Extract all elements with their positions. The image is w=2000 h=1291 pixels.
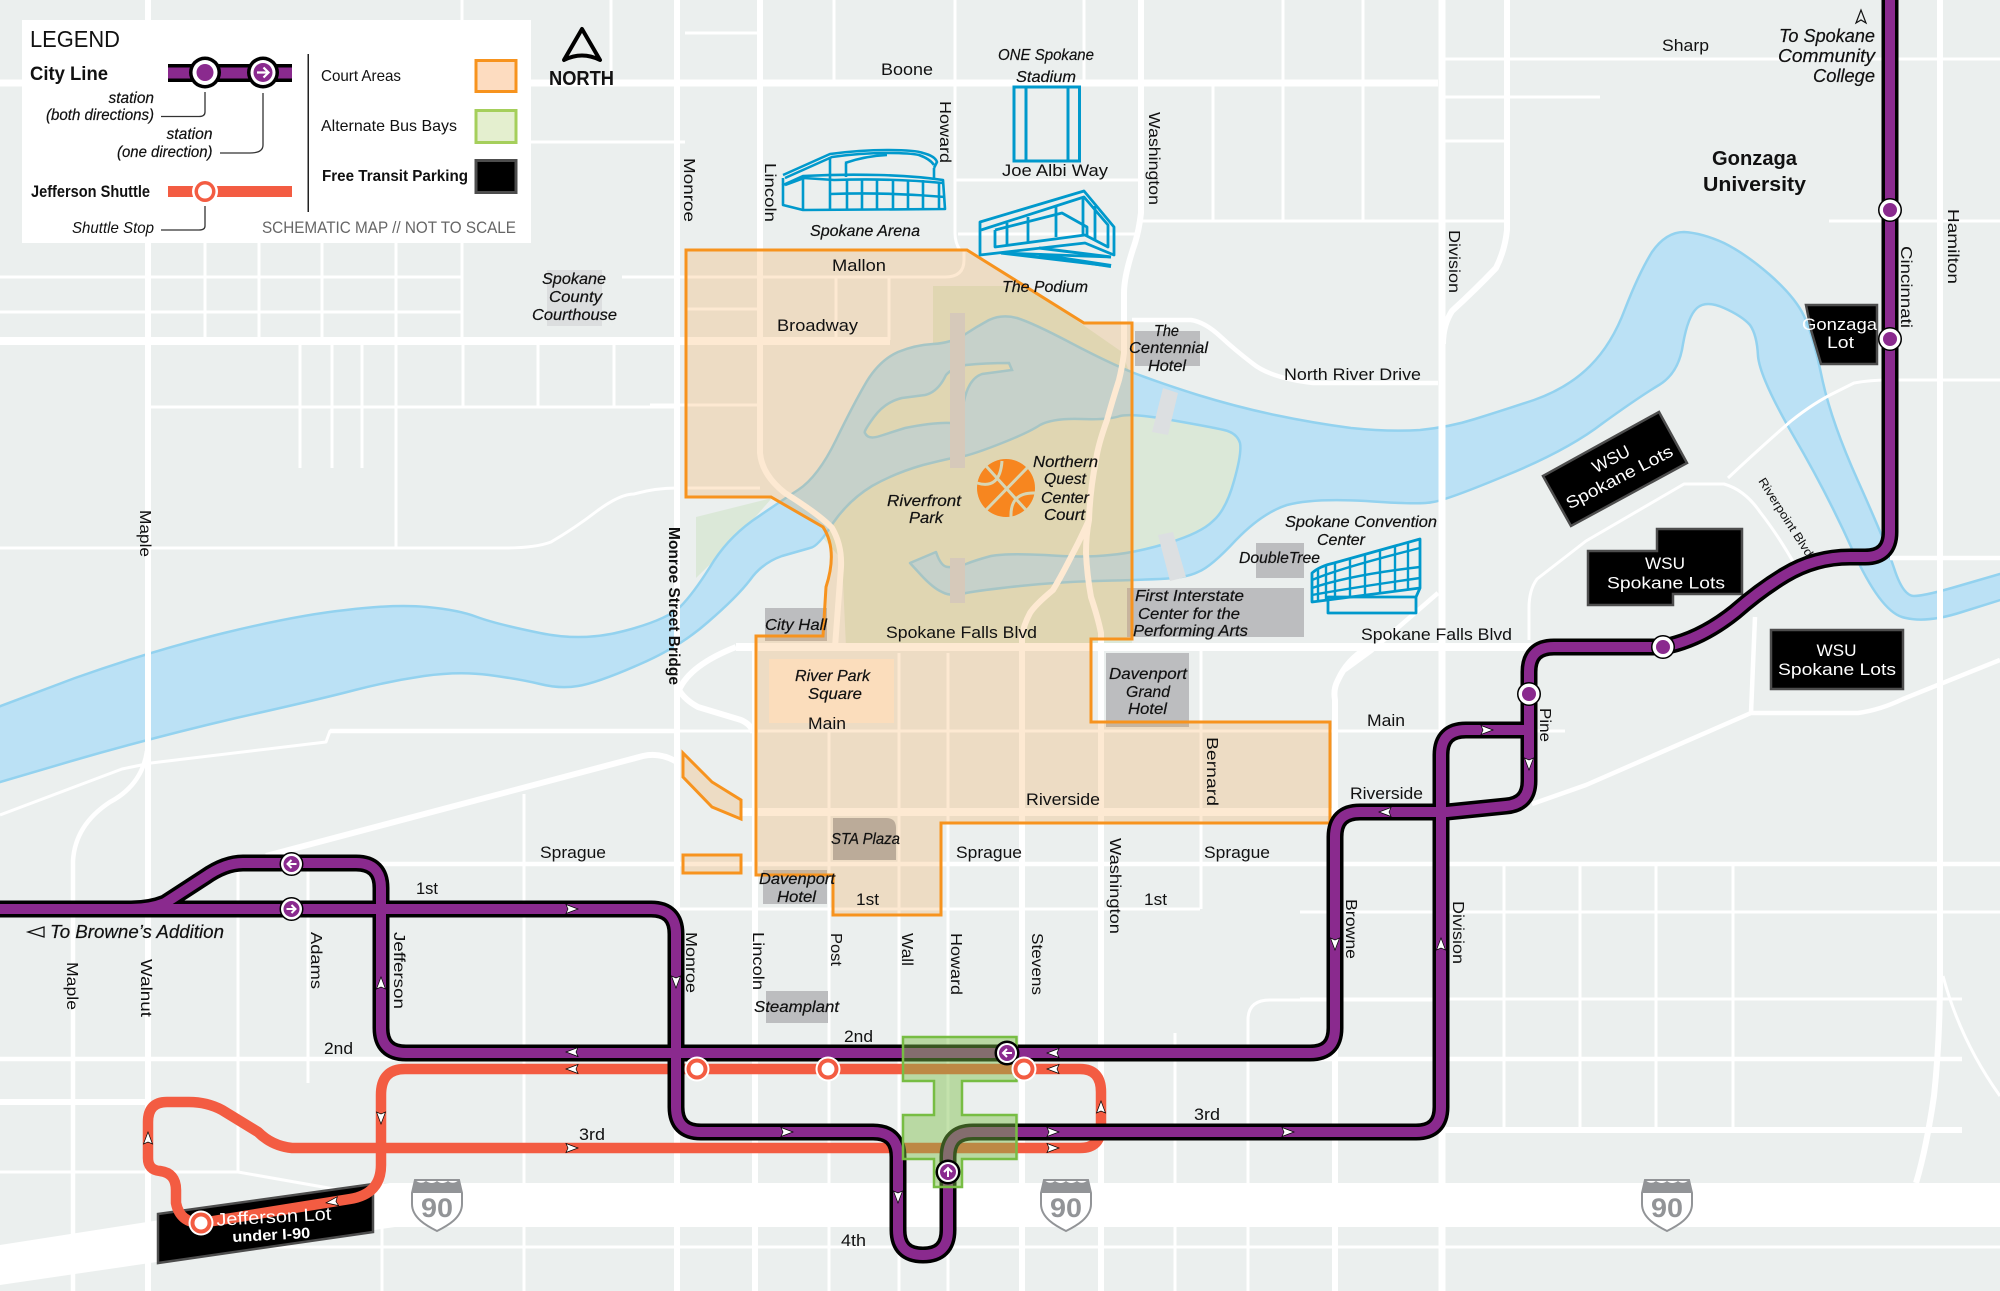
- vertical street labels: Bernard: [1203, 737, 1220, 806]
- panel: legend: [22, 20, 531, 243]
- label: The Centennial Hotel: Hotel: [1148, 358, 1186, 375]
- label: DoubleTree: DoubleTree: [1239, 550, 1320, 567]
- lot: Jefferson: [158, 1184, 373, 1263]
- vertical street labels: Riverpoint Blvd: [1755, 475, 1816, 559]
- vertical street labels: Hamilton: [1944, 209, 1961, 284]
- legend: Court Areas: [321, 60, 516, 92]
- label: The Centennial Hotel: [1129, 323, 1208, 375]
- label: WSU Spokane Lots south: WSU: [1816, 641, 1856, 660]
- icon: I-90 shield east: 90: [1651, 1193, 1683, 1223]
- legend: station both directions: [46, 90, 154, 124]
- north arrow: NORTH: [549, 68, 614, 90]
- Jefferson Shuttle route: [148, 1069, 1101, 1223]
- vertical street labels: Monroe: [680, 158, 697, 222]
- vertical street labels: Adams: [307, 932, 324, 989]
- vertical street labels: Monroe Street Bridge: [665, 527, 682, 685]
- building: STA Plaza: [833, 818, 896, 860]
- vertical street labels: Browne: [1342, 899, 1359, 959]
- label: Riverfront Park: Park: [909, 510, 944, 527]
- vertical street labels: Washington: [1145, 112, 1162, 205]
- label: WSU Spokane Lots north: Spokane Lots: [1563, 442, 1676, 513]
- label: Spokane County Courthouse: County: [549, 289, 603, 306]
- label: Northern Quest Center Court: Northern: [1033, 454, 1098, 471]
- lot: WSU south: [1771, 630, 1903, 689]
- label: The Centennial Hotel: Centennial: [1129, 340, 1208, 357]
- label: First Interstate Center for the Performing Arts: [1133, 588, 1248, 640]
- lot: WSU north: [1543, 412, 1687, 526]
- bridges in park: [950, 313, 965, 603]
- lot: WSU middle: [1588, 529, 1742, 605]
- icon: I-90 shield west: 90: [421, 1193, 453, 1223]
- label: ONE Spokane Stadium: ONE Spokane: [998, 47, 1094, 64]
- label: WSU Spokane Lots north: WSU: [1589, 442, 1633, 477]
- icon: I-90 shield east: [1642, 1180, 1692, 1231]
- label: Steamplant: Steamplant: [754, 999, 840, 1016]
- label: Gonzaga University: University: [1703, 174, 1807, 196]
- horizontal street labels: Spokane Falls Blvd: [886, 623, 1037, 642]
- label: WSU Spokane Lots middle: WSU: [1645, 554, 1685, 573]
- label: Northern Quest Center Court: Court: [1044, 507, 1086, 524]
- legend: station one direction: (one direction): [117, 144, 212, 161]
- building: City Hall: [765, 608, 827, 641]
- label: Spokane Convention Center: Center: [1317, 532, 1366, 549]
- vertical street labels: Maple: [63, 962, 80, 1010]
- horizontal street labels: 1st: [1144, 890, 1167, 909]
- building: Davenport Hotel: [763, 870, 827, 904]
- icon: Spokane Arena: [783, 150, 945, 210]
- horizontal street labels: Riverside: [1026, 790, 1100, 809]
- label: Gonzaga Lot: Lot: [1827, 333, 1854, 352]
- building: DoubleTree: [1256, 543, 1304, 578]
- vertical street labels: Howard: [936, 101, 953, 163]
- station: westbound at Adams upper: [280, 852, 304, 876]
- label: Spokane Arena: Spokane Arena: [810, 223, 920, 240]
- horizontal street labels: 3rd: [579, 1125, 605, 1144]
- direction arrows: [144, 726, 1534, 1207]
- label: First Interstate Center for the Performing Arts: First Interstate: [1135, 588, 1244, 605]
- vertical street labels: Pine: [1536, 708, 1553, 742]
- legend: station one direction: [117, 126, 213, 161]
- label: River Park Square: [795, 668, 871, 703]
- label: Jefferson Lot under I-90: Jefferson Lot: [216, 1204, 332, 1230]
- vertical street labels: Stevens: [1028, 933, 1045, 995]
- horizontal street labels: Sprague: [540, 843, 606, 862]
- parking lots: [158, 305, 1903, 1263]
- court area: main zone: [686, 250, 1330, 915]
- building: First Interstate Center: [1127, 588, 1304, 637]
- icon: basketball court: [977, 459, 1035, 517]
- legend heading: LEGEND: [30, 26, 120, 52]
- label: Davenport Grand Hotel: Hotel: [1128, 701, 1167, 718]
- vertical street labels: Cincinnati: [1897, 246, 1914, 328]
- horizontal street labels: Main: [808, 714, 846, 733]
- label: Spokane Convention Center: Spokane Convention: [1285, 514, 1437, 531]
- horizontal street labels: 4th: [841, 1231, 866, 1250]
- label: River Park Square: Square: [808, 686, 862, 703]
- label: River Park Square: River Park: [795, 668, 871, 685]
- vertical street labels: Monroe: [682, 932, 699, 993]
- legend: City Line sample: [168, 56, 292, 88]
- legend: station both directions: (both directions): [46, 107, 154, 124]
- court area: west strip: [683, 753, 741, 819]
- interstate 90: [0, 1183, 2000, 1285]
- building: Spokane County Courthouse: [547, 270, 602, 326]
- label: Spokane County Courthouse: [532, 271, 617, 324]
- label: STA Plaza: STA Plaza: [831, 831, 900, 848]
- icon: I-90 shield west: [412, 1180, 462, 1231]
- court area: west rectangle: [683, 855, 741, 873]
- label: Gonzaga University: Gonzaga: [1712, 148, 1798, 170]
- horizontal street labels: Sprague: [956, 843, 1022, 862]
- label: Jefferson Lot under I-90: [216, 1204, 333, 1247]
- horizontal street labels: Boone: [881, 60, 933, 79]
- label: Northern Quest Center Court: Center: [1041, 490, 1090, 507]
- legend: station both directions: station: [108, 90, 154, 107]
- legend: Jefferson Shuttle label: Jefferson Shuttle: [31, 182, 150, 201]
- vertical street labels: Howard: [947, 933, 964, 995]
- legend: City Line label: City Line: [30, 64, 108, 85]
- horizontal street labels: Broadway: [777, 316, 859, 335]
- horizontal street labels: [324, 36, 1709, 1250]
- label: The Podium: The Podium: [1002, 279, 1088, 296]
- building footprints: [547, 270, 1304, 1023]
- horizontal street labels: 1st: [856, 890, 879, 909]
- label: Northern Quest Center Court: Quest: [1044, 471, 1087, 488]
- label: First Interstate Center for the Performing Arts: Center for the: [1138, 606, 1240, 623]
- place name labels: [28, 10, 1876, 1016]
- label: Jefferson Lot under I-90: under I-90: [232, 1225, 311, 1246]
- label: Davenport Grand Hotel: [1109, 666, 1188, 718]
- icon: ONE Spokane Stadium: [1014, 87, 1080, 161]
- label: Davenport Hotel: Hotel: [777, 889, 816, 906]
- panel: court areas: [683, 250, 1330, 915]
- vertical street labels: Lincoln: [749, 932, 766, 990]
- vertical street labels: Division: [1445, 230, 1462, 293]
- horizontal street labels: 3rd: [1194, 1105, 1220, 1124]
- label: Spokane County Courthouse: Spokane: [542, 271, 606, 288]
- lot: Gonzaga: [1806, 305, 1877, 364]
- label: To Browne's Addition: To Browne’s Addition: [50, 922, 224, 942]
- vertical street labels: Maple: [136, 510, 153, 557]
- label: The Centennial Hotel: The: [1154, 323, 1179, 340]
- horizontal street labels: Sprague: [1204, 843, 1270, 862]
- horizontal street labels: North River Drive: [1284, 365, 1421, 384]
- label: Spokane County Courthouse: Courthouse: [532, 307, 617, 324]
- label: ONE Spokane Stadium: [998, 47, 1094, 86]
- horizontal street labels: 2nd: [324, 1039, 353, 1058]
- legend: Shuttle Stop label: Shuttle Stop: [72, 220, 154, 237]
- parking lot labels: [216, 315, 1896, 1247]
- label: WSU Spokane Lots south: Spokane Lots: [1778, 660, 1896, 679]
- Spokane River: [0, 232, 2000, 785]
- park land: [696, 286, 1250, 647]
- label: First Interstate Center for the Performing Arts: Performing Arts: [1133, 623, 1248, 640]
- legend: station leader lines: [161, 92, 263, 230]
- legend: Alternate Bus Bays: [321, 110, 516, 142]
- City Line stations, both directions: [1517, 198, 1902, 706]
- vertical street labels: Post: [827, 933, 844, 967]
- label: Spokane Convention Center: [1285, 514, 1437, 549]
- label: Gonzaga University: [1703, 148, 1807, 196]
- horizontal street labels: 2nd: [844, 1027, 873, 1046]
- horizontal street labels: Riverside: [1350, 784, 1423, 803]
- Jefferson Shuttle stops: [188, 1056, 1036, 1236]
- legend background: [22, 20, 531, 243]
- icon: I-90 shield center: [1041, 1180, 1091, 1231]
- pedestrian bridges: [1152, 388, 1186, 581]
- label: Northern Quest Center Court: [1033, 454, 1098, 524]
- label: Davenport Hotel: Davenport: [759, 871, 836, 888]
- label: City Hall: City Hall: [765, 617, 827, 634]
- label: Davenport Hotel: [759, 871, 836, 906]
- icon: I-90 shield center: 90: [1050, 1193, 1082, 1223]
- label: Riverfront Park: Riverfront: [887, 493, 962, 510]
- label: Davenport Grand Hotel: Grand: [1126, 684, 1171, 701]
- vertical street labels: Walnut: [137, 959, 154, 1018]
- alternate bus bays: [903, 1037, 1016, 1187]
- vertical street labels: Wall: [898, 933, 915, 966]
- label: WSU Spokane Lots middle: Spokane Lots: [1607, 574, 1725, 592]
- vertical street labels: Washington: [1106, 838, 1123, 934]
- label: WSU Spokane Lots middle: [1607, 554, 1725, 592]
- horizontal street labels: Sharp: [1662, 36, 1709, 55]
- horizontal street labels: Spokane Falls Blvd: [1361, 625, 1512, 644]
- legend note: SCHEMATIC MAP // NOT TO SCALE: [262, 218, 516, 237]
- building: Centennial Hotel: [1135, 331, 1200, 366]
- label: Davenport Grand Hotel: Davenport: [1109, 666, 1188, 683]
- building: Steamplant: [766, 991, 828, 1023]
- City Line stations, one direction: [280, 852, 1020, 1184]
- station: northbound at Howard: [936, 1160, 960, 1184]
- vertical street labels: [63, 101, 1961, 1018]
- legend: Alternate Bus Bays: Alternate Bus Bays: [321, 118, 457, 135]
- legend: Court Areas: Court Areas: [321, 68, 401, 85]
- vertical street labels: Jefferson: [390, 932, 407, 1009]
- icon: The Podium: [980, 191, 1114, 266]
- label: ONE Spokane Stadium: Stadium: [1016, 69, 1076, 86]
- label: To Spokane Community College: Community: [1778, 46, 1876, 66]
- horizontal street labels: Mallon: [832, 256, 886, 275]
- station: westbound at Stevens: [994, 1040, 1020, 1066]
- horizontal street labels: 1st: [416, 879, 438, 898]
- vertical street labels: Lincoln: [761, 163, 778, 222]
- icon: Spokane Convention Center: [1312, 539, 1420, 613]
- horizontal street labels: Joe Albi Way: [1002, 161, 1109, 180]
- vertical street labels: Division: [1449, 901, 1466, 964]
- legend divider: [308, 54, 309, 212]
- legend: Free Transit Parking: Free Transit Parking: [322, 168, 468, 185]
- building: Davenport Grand Hotel: [1106, 653, 1189, 727]
- label: To Spokane Community College: To Spokane: [1779, 26, 1875, 46]
- legend: shuttle sample: [168, 178, 292, 204]
- label: WSU Spokane Lots north: [1553, 424, 1676, 513]
- river park square: [769, 659, 894, 723]
- north arrow: [549, 29, 614, 90]
- river island: [865, 363, 1012, 437]
- horizontal street labels: Main: [1367, 711, 1405, 730]
- label: Riverfront Park: [887, 493, 962, 527]
- label: To Spokane Community College: [1778, 10, 1876, 86]
- legend: station one direction: station: [166, 126, 213, 143]
- station: eastbound at Adams lower: [280, 897, 304, 921]
- label: To Spokane Community College: College: [1813, 66, 1875, 86]
- label: Gonzaga Lot: [1802, 315, 1878, 352]
- label: WSU Spokane Lots south: [1778, 641, 1896, 679]
- legend: Free Transit Parking: [322, 160, 516, 192]
- label: Gonzaga Lot: Gonzaga: [1802, 315, 1878, 334]
